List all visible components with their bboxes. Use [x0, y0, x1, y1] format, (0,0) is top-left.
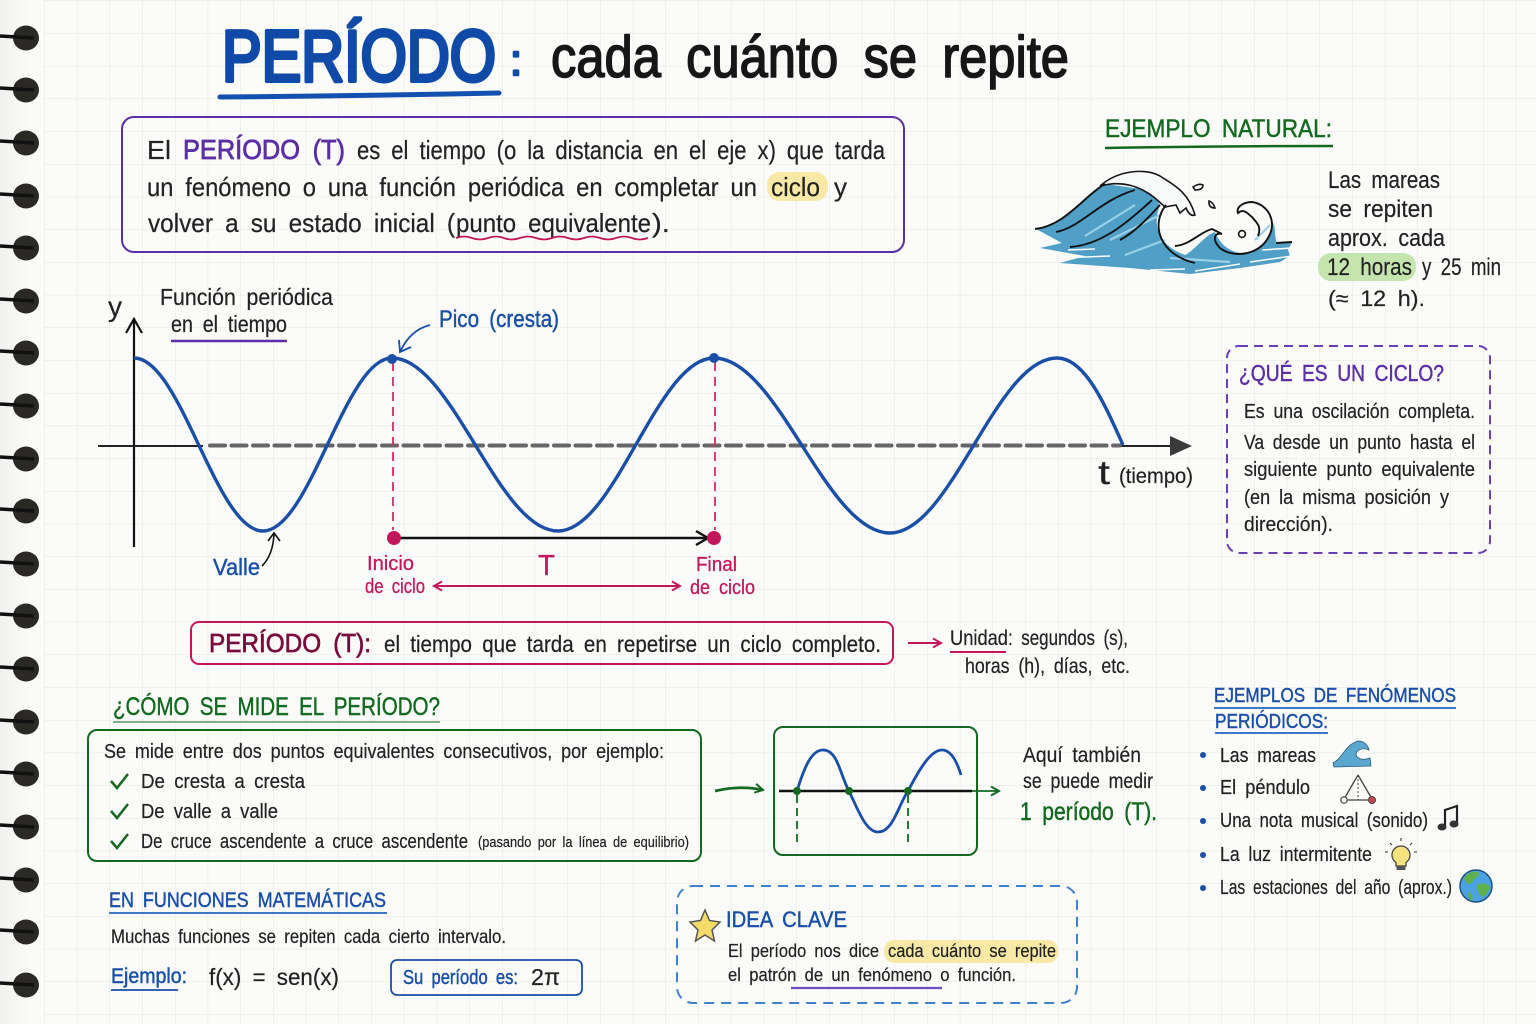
- panel: mathematical functions: Muchas funciones se repiten cada cierto intervalo.: [111, 927, 506, 948]
- panel: key idea: [677, 886, 1077, 1003]
- text block: measure note: Aquí también: [1023, 744, 1141, 767]
- panel: mathematical functions: f(x) = sen(x): [209, 964, 339, 990]
- panel: period definition strip: el tiempo que tarda en repetirse un ciclo completo.: [384, 631, 881, 657]
- panel: definition: y: [834, 172, 847, 202]
- text block: tides: [1318, 167, 1501, 311]
- text block: units: horas (h), días, etc.: [965, 655, 1130, 678]
- panel: mathematical functions: Ejemplo:: [111, 965, 187, 988]
- text block: tides: y 25 min: [1422, 254, 1501, 281]
- icon: star: [690, 910, 720, 941]
- panel: definition: [122, 117, 904, 252]
- panel: what is a cycle: dirección).: [1244, 513, 1333, 536]
- y axis: [126, 319, 142, 547]
- panel: definition: ).: [652, 208, 670, 238]
- title: [220, 17, 1069, 97]
- title: :: [510, 36, 522, 85]
- chart labels: y: [108, 291, 122, 322]
- chart labels: de ciclo: [690, 577, 755, 599]
- panel: definition: es el tiempo (o la distancia en el eje x) que tarda: [357, 135, 885, 165]
- heading: how to measure: ¿CÓMO SE MIDE EL PERÍODO?: [113, 692, 440, 721]
- icon: light bulb: [1385, 838, 1417, 870]
- text block: measure note: 1 período (T).: [1020, 798, 1157, 826]
- title: cada cuánto se repite: [551, 25, 1069, 90]
- panel: what is a cycle: Es una oscilación completa.: [1244, 400, 1475, 423]
- panel: how to measure: De cresta a cresta: [141, 770, 306, 793]
- text block: tides: aprox. cada: [1328, 225, 1446, 252]
- chart labels: Pico (cresta): [439, 306, 559, 333]
- panel: period definition strip: PERÍODO (T):: [209, 628, 371, 658]
- text block: units: [950, 627, 1130, 678]
- T span arrow: [434, 585, 680, 587]
- text block: tides: se repiten: [1328, 196, 1433, 223]
- panel: how to measure: (pasando por la línea de equilibrio): [478, 834, 689, 851]
- text block: tides: 12 horas: [1327, 254, 1412, 281]
- icon: music note: [1438, 806, 1458, 830]
- panel: what is a cycle: siguiente punto equivalente: [1244, 458, 1475, 481]
- panel: periodic phenomena list: [1200, 684, 1492, 902]
- panel: definition: PERÍODO (T): [183, 134, 345, 165]
- panel: key idea: El período nos dice: [728, 940, 879, 961]
- text block: tides: Las mareas: [1328, 167, 1440, 194]
- panel: how to measure: De valle a valle: [141, 800, 278, 823]
- panel: mathematical functions: 2π: [531, 964, 560, 990]
- panel: definition: punto equivalente: [456, 208, 651, 238]
- chart labels: (tiempo): [1119, 465, 1193, 488]
- panel: how to measure: Se mide entre dos puntos equivalentes consecutivos, por ejemplo:: [104, 740, 664, 763]
- chart labels: Inicio: [367, 553, 414, 575]
- chart labels: Función periódica: [160, 284, 333, 310]
- cycle markers: [393, 362, 715, 530]
- panel: period definition strip: [191, 622, 893, 664]
- panel: mathematical functions: Su período es:: [403, 967, 518, 989]
- text block: units: : segundos (s),: [1008, 627, 1128, 650]
- panel: how to measure: De cruce ascendente a cruce ascendente: [141, 830, 468, 853]
- icon: globe: [1460, 870, 1492, 902]
- arrow: to mini chart: [715, 788, 763, 791]
- icon: pendulum: [1341, 775, 1376, 804]
- panel: definition: El: [147, 135, 171, 165]
- panel: periodic phenomena list: Una nota musical (sonido): [1220, 810, 1428, 832]
- sine curve: [134, 358, 1123, 533]
- panel: key idea: el patrón de un fenómeno o función.: [728, 964, 1016, 985]
- panel: periodic phenomena list: El péndulo: [1220, 777, 1310, 799]
- panel: periodic phenomena list: Las estaciones del año (aprox.): [1220, 877, 1452, 899]
- icon: small wave: [1333, 741, 1371, 767]
- panel: key idea: cada cuánto se repite: [888, 940, 1056, 961]
- spiral binding rings: [0, 26, 39, 998]
- panel: mathematical functions: EN FUNCIONES MATEMÁTICAS: [109, 889, 386, 912]
- chart labels: t: [1098, 454, 1110, 491]
- text block: tides: (≈ 12 h).: [1328, 286, 1425, 311]
- panel: what is a cycle: [1227, 346, 1490, 553]
- panel: periodic phenomena list: EJEMPLOS DE FENÓMENOS: [1214, 684, 1456, 707]
- panel: definition: volver a su estado inicial (: [148, 208, 455, 238]
- panel: periodic phenomena list: La luz intermitente: [1220, 844, 1372, 866]
- chart labels: Final: [696, 554, 737, 576]
- text block: measure note: [1020, 744, 1157, 826]
- chart: periodic function: [98, 284, 1193, 599]
- chart labels: T: [538, 550, 555, 582]
- chart labels: Valle: [213, 554, 260, 580]
- arrow: to unit: [908, 642, 941, 644]
- panel: what is a cycle: Va desde un punto hasta el: [1244, 431, 1475, 454]
- icon: ocean wave: [1035, 171, 1292, 274]
- panel: what is a cycle: (en la misma posición y: [1244, 486, 1450, 509]
- panel: how to measure: [88, 730, 701, 861]
- panel: definition: un fenómeno o una función periódica en completar un: [147, 172, 757, 202]
- x axis: [98, 436, 1192, 456]
- chart: mini period diagram: [774, 727, 999, 855]
- chart labels: en el tiempo: [171, 311, 287, 337]
- panel: periodic phenomena list: Las mareas: [1220, 745, 1316, 767]
- panel: key idea: IDEA CLAVE: [726, 907, 847, 932]
- panel: periodic phenomena list: PERIÓDICOS:: [1215, 710, 1328, 733]
- chart labels: [108, 284, 1193, 599]
- heading: ejemplo natural: EJEMPLO NATURAL:: [1105, 115, 1332, 143]
- panel: definition: ciclo: [771, 172, 820, 202]
- panel: mathematical functions: [109, 889, 582, 995]
- panel: what is a cycle: ¿QUÉ ES UN CICLO?: [1239, 360, 1444, 386]
- chart labels: de ciclo: [365, 576, 425, 598]
- text block: measure note: se puede medir: [1023, 770, 1153, 793]
- title: PERÍODO: [222, 17, 496, 97]
- text block: units: Unidad: [950, 627, 1008, 650]
